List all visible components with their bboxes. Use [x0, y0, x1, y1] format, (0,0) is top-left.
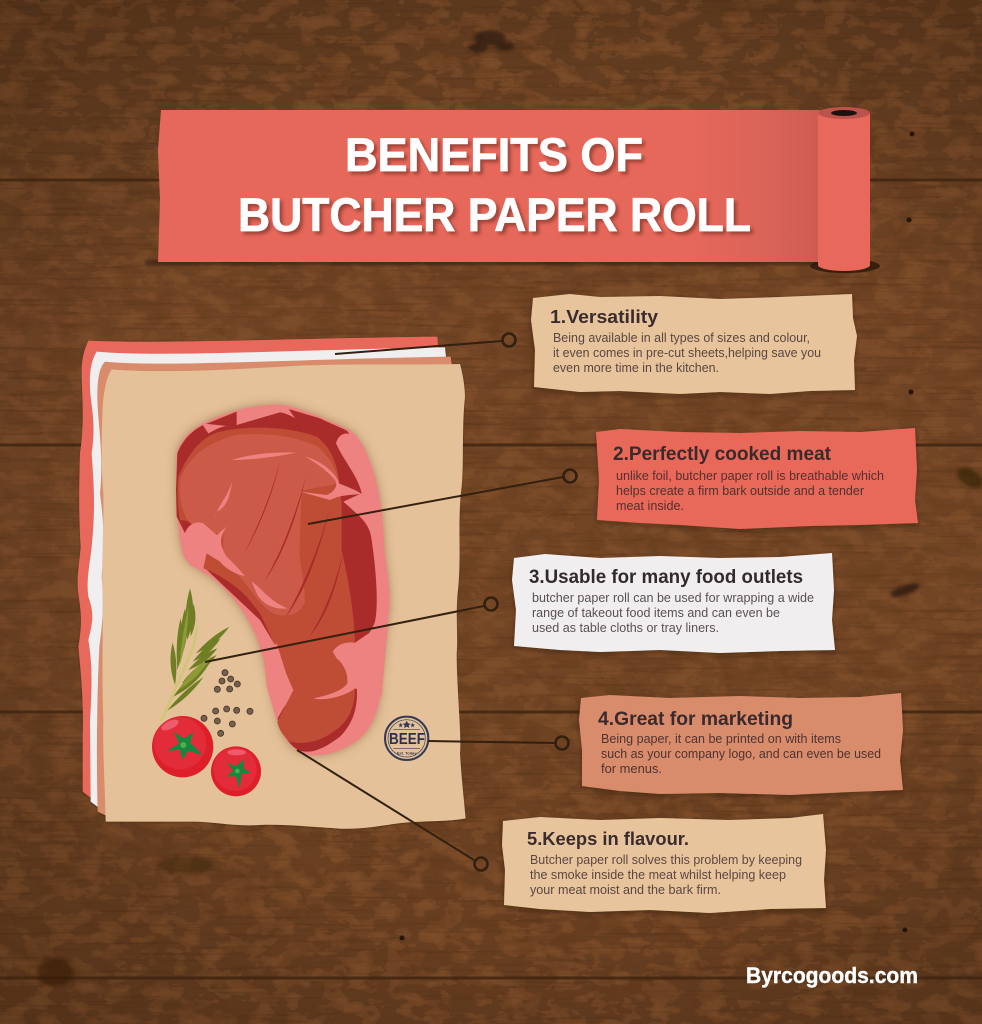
tomato large [152, 716, 213, 777]
card 5: keeps in flavour: 5.Keeps in flavour. [527, 828, 689, 849]
card 3: usable for many food outlets: used as table cloths or tray liners. [532, 621, 719, 635]
steak [176, 405, 390, 755]
card 4: great for marketing [579, 693, 903, 795]
card 1: versatility: 1.Versatility [550, 306, 659, 327]
card 1: versatility: Being available in all types of sizes and colour, [553, 331, 810, 345]
seared meat [177, 428, 355, 743]
card 2: perfectly cooked meat: meat inside. [616, 499, 684, 513]
card 1: versatility [531, 294, 857, 394]
title: BENEFITS OF [345, 128, 643, 181]
card 3: usable for many food outlets: butcher paper roll can be used for wrapping a wide [532, 591, 814, 605]
leader 1 [335, 334, 516, 354]
card 3: usable for many food outlets [512, 553, 835, 653]
title [238, 128, 751, 241]
beef stamp [385, 717, 428, 760]
card 2: perfectly cooked meat [596, 428, 918, 529]
card 3: usable for many food outlets: 3.Usable for many food outlets [529, 567, 803, 588]
lighter centre [179, 434, 339, 616]
tomato small [211, 746, 261, 796]
beef stamp: BEEF [389, 731, 425, 748]
beef stamp: Est. Today [397, 750, 417, 755]
fat [176, 405, 390, 755]
leader 2 [308, 470, 576, 524]
dark crust [176, 409, 377, 752]
card 5: keeps in flavour: Butcher paper roll solves this problem by keeping [530, 853, 802, 867]
banner sheet [158, 110, 820, 262]
card 4: great for marketing: such as your company logo, and can even be used [601, 747, 881, 761]
footer: website: Byrcogoods.com [746, 963, 918, 988]
paper stack [78, 337, 466, 829]
card 2: perfectly cooked meat: unlike foil, butcher paper roll is breathable which [616, 469, 884, 483]
marbling [183, 406, 388, 720]
card 5: keeps in flavour: your meat moist and the bark firm. [530, 883, 721, 897]
rosemary sprig [162, 588, 229, 720]
card 5: keeps in flavour: the smoke inside the meat whilst helping keep [530, 868, 786, 882]
leader 3 [205, 598, 498, 662]
peppercorns [201, 670, 253, 736]
illustration: stacked paper with steak [78, 337, 466, 829]
card 4: great for marketing: Being paper, it can be printed on with items [601, 732, 841, 746]
grill marks [243, 462, 343, 638]
card 1: versatility: even more time in the kitchen. [553, 361, 719, 375]
leader 4 [428, 736, 568, 750]
card 4: great for marketing: for menus. [601, 762, 662, 776]
card 2: perfectly cooked meat: 2.Perfectly cooked meat [613, 444, 832, 465]
leader lines [205, 334, 576, 870]
card 1: versatility: it even comes in pre-cut sheets,helping save you [553, 346, 821, 360]
card 5: keeps in flavour [502, 814, 826, 913]
card 2: perfectly cooked meat: helps create a firm bark outside and a tender [616, 484, 864, 498]
banner: butcher paper roll [145, 107, 880, 273]
card 3: usable for many food outlets: range of takeout food items and can even be [532, 606, 780, 620]
card 4: great for marketing: 4.Great for marketing [598, 709, 793, 730]
paper roll [818, 107, 870, 271]
leader 5 [297, 750, 488, 870]
title: BUTCHER PAPER ROLL [238, 188, 751, 241]
